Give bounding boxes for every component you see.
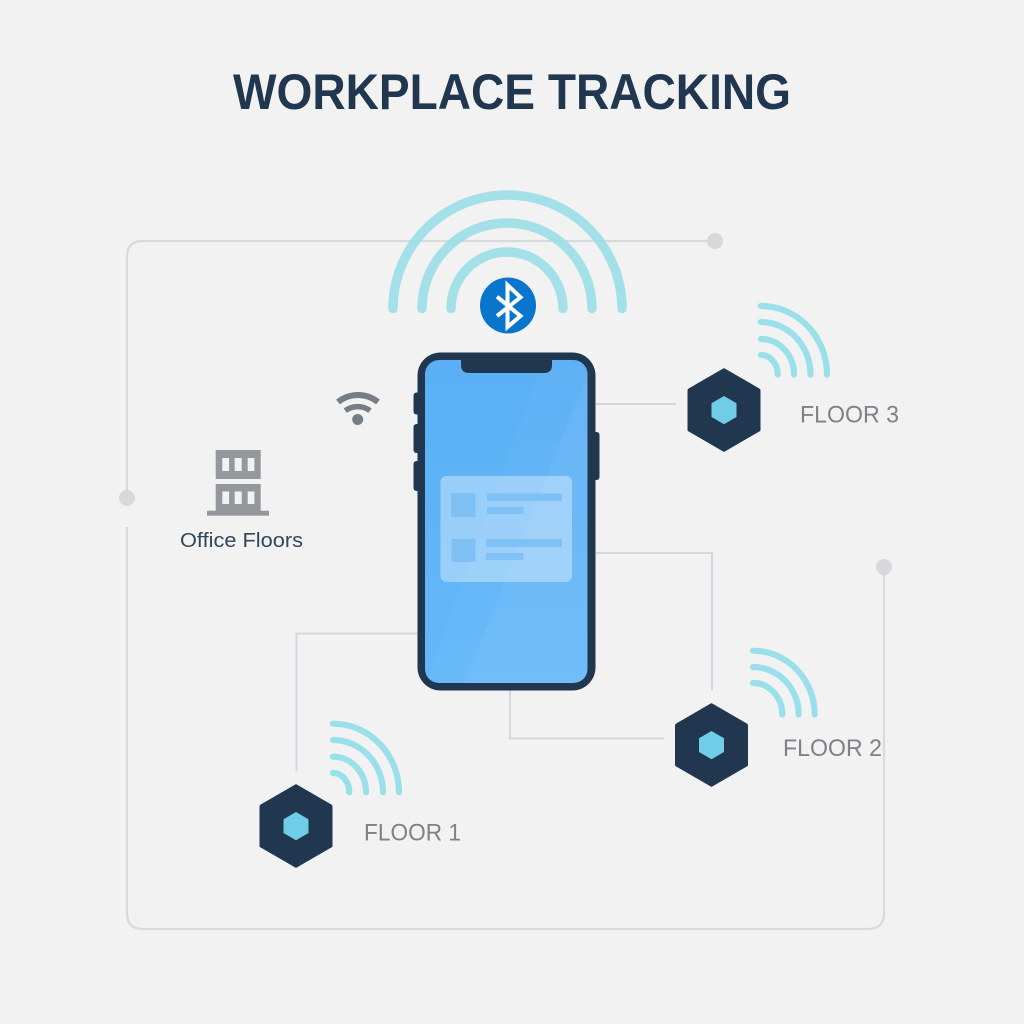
outer connector lines [119, 233, 892, 929]
beacon: floor 2 [677, 651, 882, 785]
label: office floors: Office Floors [180, 530, 303, 552]
icon: bluetooth [480, 278, 536, 334]
beacon: floor 3 [690, 306, 899, 450]
icon: office building [207, 450, 269, 516]
icon: phone [414, 352, 600, 690]
icon: wifi [338, 395, 378, 425]
beacon: floor 1 [262, 724, 461, 866]
inner connector lines [296, 404, 712, 772]
title: WORKPLACE TRACKING [233, 64, 791, 120]
beacon: floor 3: FLOOR 3 [800, 402, 899, 428]
beacon: floor 2: FLOOR 2 [783, 735, 882, 762]
beacon: floor 1: FLOOR 1 [364, 820, 461, 846]
icon: large broadcast arcs [393, 195, 622, 308]
card on phone screen [440, 476, 572, 582]
